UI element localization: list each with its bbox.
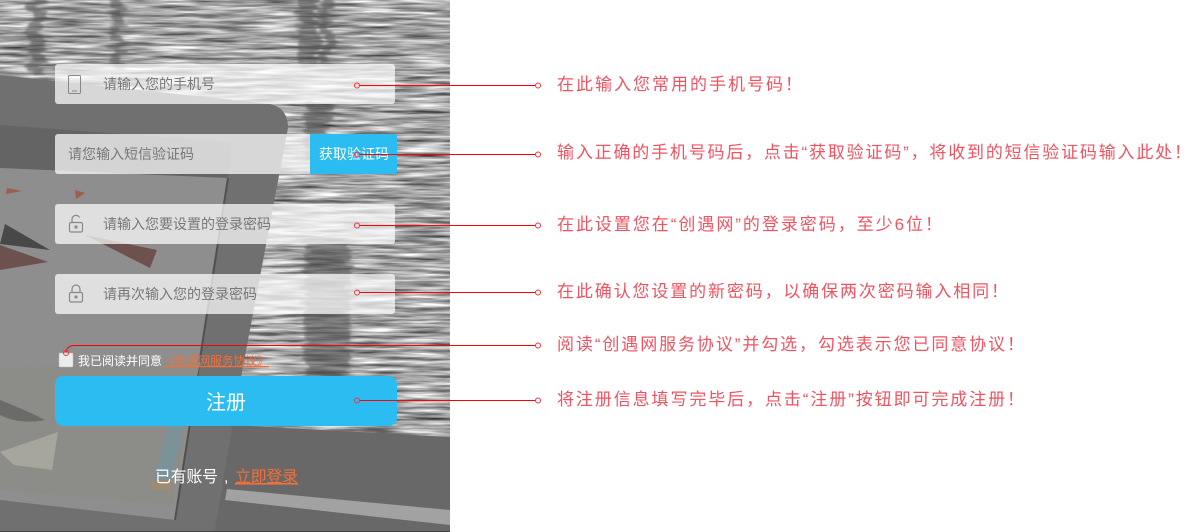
placeholder: phone: 请输入您的手机号	[103, 76, 215, 92]
field: confirm password	[55, 274, 395, 314]
login link: ,	[224, 469, 228, 486]
agreement	[59, 353, 269, 368]
hint: confirm password: 在此确认您设置的新密码，以确保两次密码输入相同！	[557, 282, 1008, 301]
form	[55, 64, 397, 486]
callout lines	[64, 83, 540, 403]
icon: phone	[68, 76, 80, 94]
placeholder: confirm password: 请再次输入您的登录密码	[103, 286, 257, 302]
login link: 已有账号	[155, 468, 218, 486]
icon: open lock	[70, 215, 82, 232]
field: password	[55, 204, 395, 244]
button: register: 注册	[206, 391, 246, 414]
field: phone	[55, 64, 395, 104]
icon: lock	[70, 285, 82, 302]
button: register	[55, 376, 397, 426]
agreement: 《创遇网服务协议》	[163, 353, 269, 368]
button: get code: 获取验证码	[319, 146, 389, 162]
hint: register: 将注册信息填写完毕后，点击“注册”按钮即可完成注册！	[557, 390, 1024, 409]
button: get code	[310, 134, 397, 174]
placeholder: password: 请输入您要设置的登录密码	[103, 216, 271, 232]
placeholder: sms code: 请您输入短信验证码	[68, 146, 194, 162]
hint: password: 在此设置您在“创遇网”的登录密码，至少6位！	[557, 215, 942, 234]
field: sms code	[55, 134, 397, 174]
hint: sms code: 输入正确的手机号码后，点击“获取验证码”，将收到的短信验证码输入此处！	[557, 143, 1191, 162]
login link: 立即登录	[235, 468, 298, 486]
hint: phone: 在此输入您常用的手机号码！	[557, 75, 802, 94]
hint: agreement: 阅读“创遇网服务协议”并勾选，勾选表示您已同意协议！	[557, 335, 1024, 354]
background photo	[0, 0, 450, 532]
agreement: 我已阅读并同意	[78, 353, 162, 368]
login link	[155, 468, 298, 486]
